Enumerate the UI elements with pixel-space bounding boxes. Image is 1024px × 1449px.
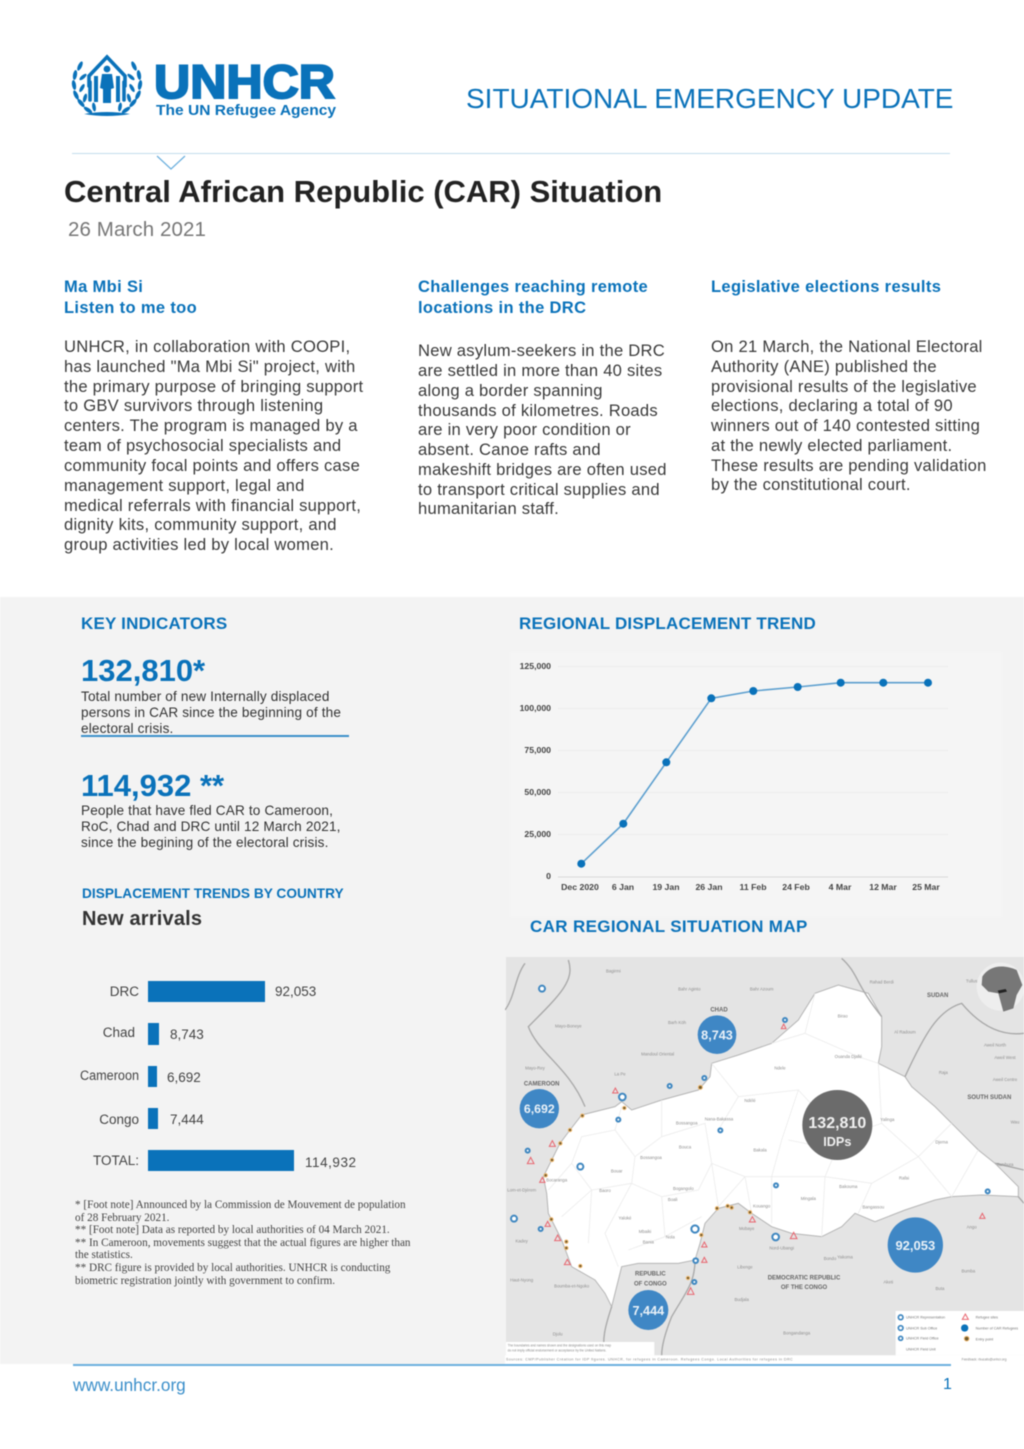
place names: Djema <box>935 1139 949 1144</box>
place names: Yaloké <box>619 1215 632 1220</box>
line chart: regional displacement trend: 125,000 <box>520 661 551 671</box>
map source line <box>505 1355 1024 1370</box>
stat underline <box>81 735 349 737</box>
place names: Wau <box>1011 1119 1020 1124</box>
line chart: regional displacement trend: 12 Mar <box>869 882 897 892</box>
text: new IDPs description: persons in CAR since the beginning of the <box>81 705 341 720</box>
country labels: OF CONGO <box>634 1281 667 1287</box>
country labels: CHAD <box>710 1007 728 1013</box>
place names: Nord-Ubangi <box>769 1245 794 1250</box>
text block: Challenges: humanitarian staff. <box>418 499 559 518</box>
inset: Africa locator <box>977 963 1024 1012</box>
bubble: Cameroon: 6,692 <box>524 1102 555 1116</box>
bubble: IDPs: 132,810 <box>808 1115 866 1132</box>
place names: Tambura <box>997 1162 1014 1167</box>
text block: Challenges: to transport critical supplies and <box>418 480 660 499</box>
bar chart: new arrivals: 114,932 <box>305 1155 356 1170</box>
place names: Aketi <box>884 1279 893 1284</box>
text block: Ma Mbi Si: to GBV survivors through listening <box>64 396 323 415</box>
text block: Legislative: elections, declaring a total of 90 <box>711 396 953 415</box>
place names: Bogangolo <box>673 1186 694 1191</box>
place names: Kouango <box>753 1203 771 1208</box>
place names: Rafai <box>899 1175 909 1180</box>
text block: Ma Mbi Si: medical referrals with financial support, <box>64 496 361 515</box>
place names: Bouca <box>679 1145 692 1150</box>
text block: Legislative: These results are pending validation <box>711 456 987 475</box>
country labels: OF THE CONGO <box>781 1285 827 1291</box>
place names: Bossangoa <box>676 1121 698 1126</box>
map legend: Refugee sites <box>976 1315 998 1319</box>
text block: Ma Mbi Si: centers. The program is managed by a <box>64 416 358 435</box>
heading: situation map: CAR REGIONAL SITUATION MAP <box>530 917 808 936</box>
line chart: regional displacement trend <box>510 652 1002 917</box>
text block: Ma Mbi Si: UNHCR, in collaboration with COOPI, <box>64 337 350 356</box>
place names: Libenge <box>737 1264 753 1269</box>
header label: SITUATIONAL EMERGENCY UPDATE <box>466 83 953 114</box>
place names: La Pe <box>614 1071 626 1076</box>
header divider with chevron <box>72 152 950 170</box>
place names: Nana-Bakassa <box>705 1117 734 1122</box>
text block: Ma Mbi Si: management support, legal and <box>64 476 305 495</box>
place names: Rahad Berdi <box>870 979 894 984</box>
line chart: regional displacement trend: 4 Mar <box>829 882 852 892</box>
line chart: regional displacement trend: 24 Feb <box>782 882 810 892</box>
footer rule <box>73 1364 951 1366</box>
text block: Ma Mbi Si: group activities led by local women. <box>64 535 334 554</box>
footnotes: ** In Cameroon, movements suggest that the actual figures are higher than <box>75 1237 411 1249</box>
bubble: Republic of Congo: 7,444 <box>632 1304 664 1318</box>
country labels <box>524 993 1011 1291</box>
place names: Ndele <box>774 1065 786 1070</box>
text block: Ma Mbi Si: team of psychosocial specialists and <box>64 436 341 455</box>
place names: Mingala <box>801 1196 816 1201</box>
map disclaimer: do not imply official endorsement or acceptance by the United Nations. <box>508 1348 607 1352</box>
bubble: Chad <box>698 1015 736 1054</box>
footer: website: www.unhcr.org <box>73 1375 186 1395</box>
text block: Legislative: by the constitutional court. <box>711 475 911 494</box>
country labels: SOUTH SUDAN <box>967 1095 1011 1101</box>
place names: Bahr Azoum <box>750 987 774 992</box>
line chart: regional displacement trend: 100,000 <box>520 703 551 713</box>
place names: Baoro <box>599 1188 611 1193</box>
logo tagline: The UN Refugee Agency <box>156 103 336 119</box>
place names: Mayo-Rey <box>525 1065 546 1070</box>
heading: Challenges <box>418 278 648 317</box>
place names: Birao <box>838 1014 848 1019</box>
map legend: Entry point <box>976 1337 993 1341</box>
map source line: Sources: CMP/Publisher Création for IDP figures. UNHCR, for refugees in Cameroon. Refugees Congo. Local Authorities for refugees in DRC <box>506 1358 793 1362</box>
bar chart: new arrivals: TOTAL: <box>93 1153 139 1168</box>
line chart: regional displacement trend: 19 Jan <box>652 882 680 892</box>
footnotes: * [Foot note] Announced by la Commission de Mouvement de population <box>75 1199 406 1211</box>
bubble: DRC <box>888 1217 943 1273</box>
heading: Ma Mbi Si: Listen to me too <box>64 299 197 317</box>
text: refugees description: since the begining of the electoral crisis. <box>81 835 328 850</box>
place names: Bakala <box>753 1147 767 1152</box>
icon: laurel wreath emblem <box>71 61 143 116</box>
footer: page number: 1 <box>943 1376 952 1393</box>
place names: Bocaranga <box>546 1178 568 1183</box>
country labels: REPUBLIC <box>635 1272 666 1278</box>
footnotes: the statistics. <box>75 1249 133 1261</box>
place names: Mayo-Boneye <box>555 1023 582 1028</box>
map disclaimer <box>506 1342 654 1355</box>
text block: Legislative: On 21 March, the National Electoral <box>711 337 983 356</box>
footnotes: ** DRC figure is provided by local authorities. UNHCR is conducting <box>75 1262 390 1274</box>
entry point markers <box>544 1085 752 1280</box>
bar chart: new arrivals: Chad <box>103 1025 135 1040</box>
footnotes: biometric registration jointly with government to confirm. <box>75 1275 335 1287</box>
text block: Challenges: are in very poor condition or <box>418 420 631 439</box>
map: CAR regional situation <box>504 957 1024 1364</box>
map legend: UNHCR Field Unit <box>906 1347 936 1351</box>
place names <box>507 969 1020 1337</box>
bubble: IDPs <box>802 1090 872 1160</box>
footnotes <box>74 1199 411 1288</box>
bar chart: new arrivals: Cameroon <box>80 1068 139 1083</box>
text: new IDPs description: Total number of new Internally displaced <box>81 689 330 704</box>
place names: Kadey <box>516 1238 529 1243</box>
stat: refugees: 114,932 ** <box>81 768 224 803</box>
place names: Bouar <box>611 1168 623 1173</box>
text block: Legislative: winners out of 140 contested sitting <box>711 416 980 435</box>
place names: Ndélé <box>744 1098 756 1103</box>
line chart: regional displacement trend: 11 Feb <box>739 882 767 892</box>
place names: Bongandanga <box>783 1330 811 1335</box>
place names: Bahr Aginto <box>678 987 701 992</box>
place names: Bakouma <box>839 1184 858 1189</box>
heading: Challenges: Challenges reaching remote <box>418 278 648 296</box>
bar chart: new arrivals: 7,444 <box>170 1112 204 1127</box>
logo wordmark: UNHCR <box>154 55 335 108</box>
CAR territory <box>543 985 1018 1307</box>
bar chart: new arrivals: 6,692 <box>167 1070 201 1085</box>
heading: key indicators: KEY INDICATORS <box>81 614 227 633</box>
place names: Nola <box>666 1235 675 1240</box>
bar chart: new arrivals: Congo <box>99 1112 139 1127</box>
place names: Mbaiki <box>639 1229 651 1234</box>
place names: Buta <box>936 1286 945 1291</box>
map legend: UNHCR Field Office <box>906 1337 939 1341</box>
text: new IDPs description <box>80 689 341 736</box>
place names: Yalinga <box>880 1117 895 1122</box>
text: refugees description: RoC, Chad and DRC until 12 March 2021, <box>81 819 341 834</box>
place names: Bangassou <box>862 1205 885 1210</box>
place names: Mandoul Oriental <box>641 1052 674 1057</box>
office markers <box>511 986 990 1284</box>
text block: Challenges: absent. Canoe rafts and <box>418 440 601 459</box>
line chart: regional displacement trend: 0 <box>546 871 551 881</box>
map legend: UNHCR Representation <box>906 1316 945 1320</box>
place names: Raja <box>939 1070 948 1075</box>
heading: regional trend: REGIONAL DISPLACEMENT TREND <box>519 614 816 633</box>
bubble: IDPs: IDPs <box>823 1135 851 1149</box>
place names: Bagirmi <box>606 969 621 974</box>
map disclaimer: The boundaries and names shown and the designations used on this map <box>508 1344 611 1348</box>
place names: Ango <box>967 1224 977 1229</box>
panel: grey data section <box>0 597 1024 1364</box>
date: 26 March 2021 <box>68 218 206 241</box>
heading: Legislative: Legislative elections results <box>711 278 941 296</box>
place names: Aweil North <box>984 1043 1007 1048</box>
bubble: Chad: 8,743 <box>701 1028 733 1042</box>
bubble: Cameroon <box>520 1089 559 1128</box>
bar chart: new arrivals: 92,053 <box>275 984 316 999</box>
neighbouring borders <box>505 958 1024 1355</box>
text block: Challenges: thousands of kilometres. Roads <box>418 401 658 420</box>
header: UNHCR logo <box>71 54 336 119</box>
bar chart: new arrivals: 8,743 <box>170 1027 204 1042</box>
text block: Challenges <box>418 341 667 518</box>
place names: Bondo <box>824 1256 837 1261</box>
place names: Mobaye <box>739 1226 755 1231</box>
place names: Aweil West <box>994 1055 1016 1060</box>
subheading: new arrivals: New arrivals <box>82 908 202 930</box>
place names: Aweil Centre <box>993 1077 1018 1082</box>
text block: Challenges: are settled in more than 40 sites <box>418 361 662 380</box>
text block: Challenges: New asylum-seekers in the DRC <box>418 341 665 360</box>
line chart: regional displacement trend: 25 Mar <box>912 882 940 892</box>
country labels: CAMEROON <box>524 1081 560 1087</box>
text block: Ma Mbi Si: has launched "Ma Mbi Si" project, with <box>64 357 356 376</box>
heading: Ma Mbi Si: Ma Mbi Si <box>64 278 143 296</box>
place names: Budjala <box>734 1297 749 1302</box>
bubble: DRC: 92,053 <box>895 1238 935 1253</box>
bar chart: new arrivals: DRC <box>110 984 139 999</box>
text: refugees description: People that have fled CAR to Cameroon, <box>81 803 333 818</box>
line chart: regional displacement trend: 6 Jan <box>612 882 634 892</box>
text block: Legislative: at the newly elected parliament. <box>711 436 952 455</box>
line chart: regional displacement trend: 25,000 <box>524 829 551 839</box>
refugee site markers <box>527 1024 985 1294</box>
line chart: regional displacement trend: Dec 2020 <box>561 882 599 892</box>
footnotes: ** [Foot note] Data as reported by local authorities of 04 March 2021. <box>75 1224 390 1236</box>
place names: Barh Köh <box>668 1020 687 1025</box>
map source line: Feedback: rbucafo@unhcr.org <box>962 1358 1007 1362</box>
country labels: SUDAN <box>927 993 948 999</box>
line chart: regional displacement trend: 26 Jan <box>695 882 723 892</box>
title: Central African Republic (CAR) Situation <box>64 174 662 209</box>
place names: Yakoma <box>837 1254 853 1259</box>
text block: Ma Mbi Si: dignity kits, community support, and <box>64 515 337 534</box>
map legend: Number of CAR Refugees <box>976 1327 1018 1331</box>
bar chart: new arrivals <box>80 980 356 1172</box>
text block: Legislative: provisional results of the legislative <box>711 377 977 396</box>
stat: new IDPs: 132,810* <box>81 653 205 688</box>
map legend <box>896 1311 1024 1355</box>
place names: Al Radoum <box>894 1029 916 1034</box>
text block: Ma Mbi Si: the primary purpose of bringing support <box>64 377 363 396</box>
bubble: Republic of Congo <box>628 1290 668 1330</box>
footnotes: of 28 February 2021. <box>75 1212 169 1224</box>
place names: Lom-et-Djérem <box>507 1188 536 1193</box>
place names: Boali <box>668 1197 678 1202</box>
country labels: DEMOCRATIC REPUBLIC <box>768 1275 841 1281</box>
line chart: regional displacement trend: 50,000 <box>524 787 551 797</box>
heading: Ma Mbi Si <box>64 278 197 317</box>
text block: Challenges: makeshift bridges are often used <box>418 460 667 479</box>
place names: Bania <box>643 1239 654 1244</box>
text: new IDPs description: electoral crisis. <box>81 721 173 736</box>
place names: Bumba <box>961 1269 976 1274</box>
text block: Ma Mbi Si: community focal points and offers case <box>64 456 360 475</box>
heading: displacement trends: DISPLACEMENT TRENDS BY COUNTRY <box>82 886 344 901</box>
text block: Legislative <box>710 337 987 494</box>
heading: Challenges: locations in the DRC <box>418 299 586 317</box>
line chart: regional displacement trend: 75,000 <box>524 745 551 755</box>
text: refugees description <box>80 803 341 851</box>
place names: Djolu <box>553 1332 563 1337</box>
text block: Ma Mbi Si <box>64 337 364 554</box>
place names: Tullus <box>966 979 977 984</box>
place names: Ouanda Djallé <box>835 1054 863 1059</box>
place names: Bossangoa <box>640 1155 662 1160</box>
place names: Haut-Nyong <box>510 1278 534 1283</box>
map legend: UNHCR Sub Office <box>906 1326 937 1330</box>
place names: Boumba-et-Ngoko <box>554 1283 590 1288</box>
text block: Legislative: Authority (ANE) published the <box>711 357 937 376</box>
text block: Challenges: along a border spanning <box>418 381 603 400</box>
